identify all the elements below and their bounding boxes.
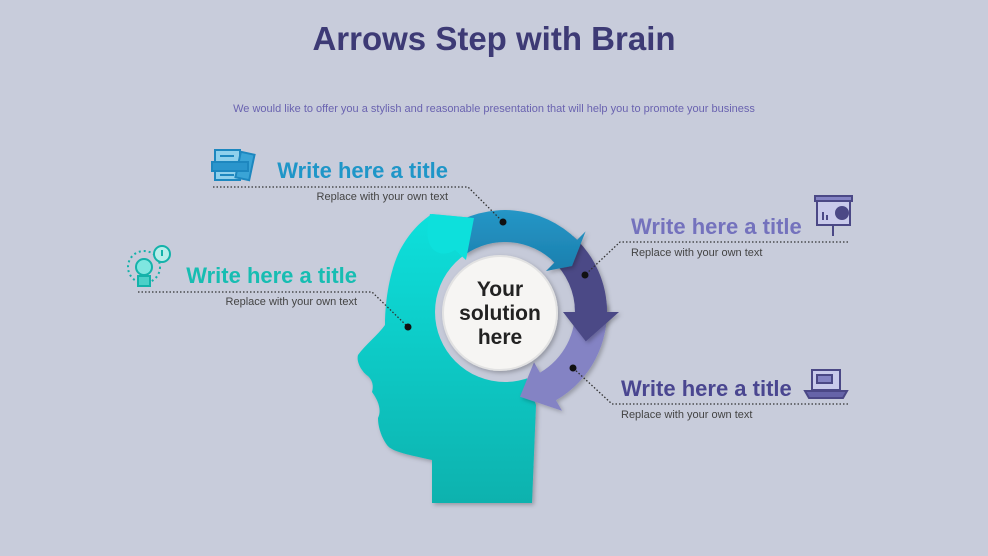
text: Replace with your own text [226,296,357,308]
icon: laptop [805,370,847,398]
inner disc [435,242,575,382]
teal arrowhead [427,214,474,260]
center text: Your [477,278,523,301]
label 3: Write here a title [631,214,802,239]
label 2: Write here a title [186,263,357,288]
head silhouette [358,214,536,503]
text: Replace with your own text [621,409,752,421]
icon: presentation [815,196,852,236]
icon: bulb [128,246,170,286]
icon: document [212,150,255,180]
connector lines [138,187,848,404]
diagram: solution [459,302,541,325]
title: Arrows Step with Brain [312,20,676,57]
center circle [443,256,557,370]
diagram: here [478,326,522,349]
arrow: blue [446,210,586,271]
arrow: light purple [520,303,607,411]
arrow: dark purple [552,236,619,341]
text: Replace with your own text [317,191,448,203]
label 4: Write here a title [621,376,792,401]
subtitle: We would like to offer you a stylish and reasonable presentation that will help you to promote your business [233,103,755,115]
dots [404,218,588,372]
text: Replace with your own text [631,247,762,259]
label 1: Write here a title [277,158,448,183]
